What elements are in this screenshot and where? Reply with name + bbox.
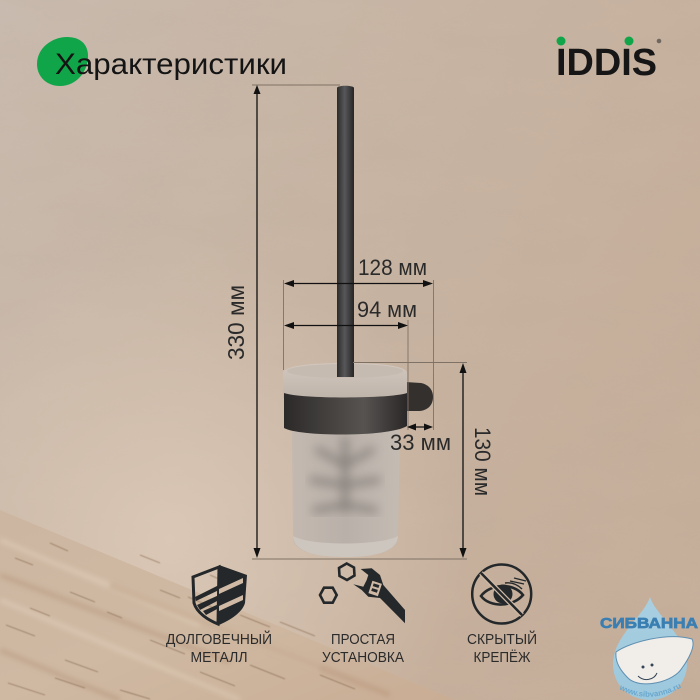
caption: durable metal: ДОЛГОВЕЧНЫЙ (166, 630, 272, 648)
blurred brush head (312, 440, 378, 510)
nut (320, 588, 337, 603)
bathtub (616, 637, 693, 684)
brush handle (337, 86, 354, 377)
dimension lines (252, 85, 467, 559)
label: 128 mm: 128 мм (358, 255, 427, 280)
label: 94 mm: 94 мм (357, 297, 417, 322)
arrow: 330 mm (254, 85, 260, 558)
caption: durable metal (166, 630, 272, 666)
caption: easy installation (322, 632, 404, 666)
caption: hidden mount: СКРЫТЫЙ (467, 630, 537, 648)
caption: easy installation: ПРОСТАЯ (331, 632, 395, 648)
arrow: 94 mm (284, 322, 408, 329)
arrow: 128 mm (284, 280, 433, 287)
title text: Характеристики (55, 48, 287, 81)
title (37, 37, 287, 86)
icon: shield (193, 565, 247, 625)
wall bracket (405, 382, 433, 411)
label: 33 mm: 33 мм (390, 430, 451, 455)
caption: durable metal: МЕТАЛЛ (190, 650, 248, 666)
stone floor (0, 510, 455, 700)
icon: hidden mount eye (472, 564, 531, 624)
brand name: СИБВАННА (600, 615, 698, 632)
label: 330 mm: 330 мм (223, 285, 249, 360)
website: www.sibvanna.ru (620, 684, 681, 697)
caption: hidden mount (467, 630, 537, 666)
caption: hidden mount: КРЕПЁЖ (474, 649, 531, 666)
nut (339, 564, 354, 580)
logo: IDDIS: IDDIS (556, 42, 657, 84)
glass base (293, 536, 398, 557)
glass body (292, 430, 400, 557)
glass rim (283, 363, 407, 398)
wrench (353, 568, 405, 623)
caption: easy installation: УСТАНОВКА (322, 650, 404, 666)
green blob (37, 37, 88, 86)
arrow: 33 mm (407, 424, 433, 430)
metal band (284, 393, 407, 435)
product: toilet brush holder (283, 86, 433, 557)
water drop (613, 597, 687, 700)
arrow: 130 mm (460, 363, 466, 558)
watermark: Sibvanna (600, 597, 698, 700)
icon: wrench and nuts (320, 564, 405, 623)
label: 130 mm: 130 мм (470, 427, 495, 496)
